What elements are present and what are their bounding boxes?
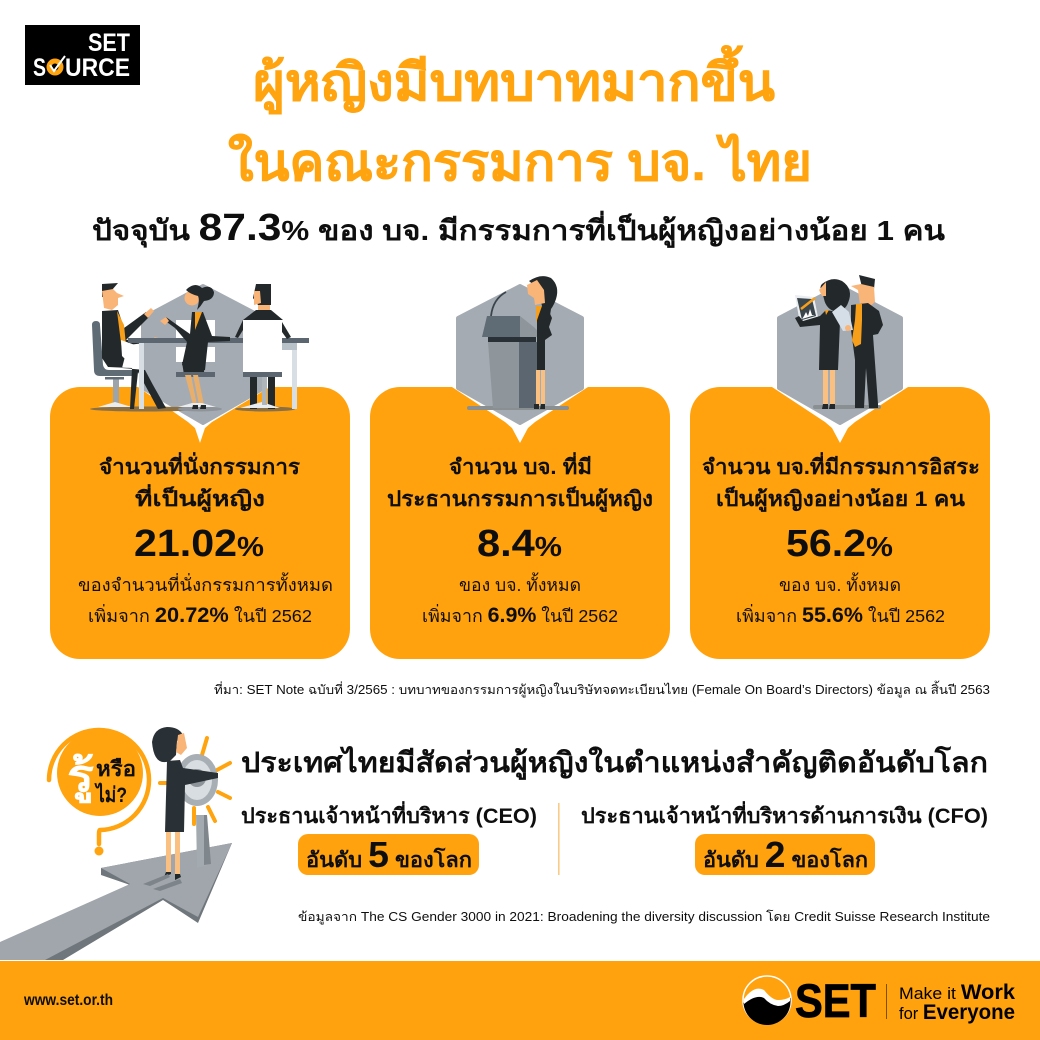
- icon: did you know bubble: รู้: [67, 752, 94, 803]
- card text: [78, 451, 333, 627]
- card text: จำนวน บจ. ที่มี: [449, 451, 592, 479]
- logo: SET SOURCE: [25, 25, 140, 85]
- panel: female chairpersons: [370, 276, 670, 659]
- CFO rank: อันดับ 2 ของโลก: [703, 834, 868, 875]
- card text: เพิ่มจาก 6.9% ในปี 2562: [422, 604, 618, 627]
- CEO rank: อันดับ 5 ของโลก: [306, 834, 472, 875]
- logo: SET SOURCE: SET: [88, 29, 130, 57]
- logo: SET: SET: [795, 974, 876, 1027]
- card text: ประธานกรรมการเป็นผู้หญิง: [387, 485, 653, 513]
- card text: จำนวนที่นั่งกรรมการ: [99, 451, 301, 479]
- logo: SET SOURCE: URCE: [65, 54, 130, 82]
- CFO rank: ประธานเจ้าหน้าที่บริหารด้านการเงิน (CFO): [581, 800, 988, 828]
- card text: [702, 451, 980, 627]
- card text: 21.02 %: [134, 523, 264, 565]
- card text: เพิ่มจาก 55.6% ในปี 2562: [736, 604, 945, 627]
- logo: SET: Make it Work: [899, 981, 1015, 1004]
- icon: did you know bubble: หรือ: [96, 757, 136, 781]
- logo: SET SOURCE: S: [33, 54, 46, 82]
- CEO rank: [241, 800, 537, 875]
- card text: [387, 451, 653, 627]
- illustration: woman at podium: [467, 276, 569, 410]
- heading: Thailand ranking: ประเทศไทยมีสัดส่วนผู้หญิงในตำแหน่งสำคัญติดอันดับโลก: [241, 745, 988, 780]
- source note 2: ข้อมูลจาก The CS Gender 3000 in 2021: Broadening the diversity discussion โดย Credit Suisse Research Institute: [298, 909, 990, 925]
- card text: ของ บจ. ทั้งหมด: [779, 572, 901, 595]
- title: ในคณะกรรมการ บจ. ไทย: [228, 133, 812, 191]
- card text: 56.2%: [786, 523, 893, 565]
- title: [228, 45, 812, 191]
- CFO rank: [581, 800, 988, 875]
- card text: ที่เป็นผู้หญิง: [135, 483, 265, 513]
- CEO rank: ประธานเจ้าหน้าที่บริหาร (CEO): [241, 800, 537, 828]
- card text: ของจำนวนที่นั่งกรรมการทั้งหมด: [78, 572, 333, 595]
- icon: did you know bubble: [49, 730, 149, 856]
- illustration: woman and man with tablets: [795, 275, 883, 409]
- icon: did you know bubble: ไม่?: [94, 782, 127, 807]
- card text: เป็นผู้หญิงอย่างน้อย 1 คน: [716, 485, 966, 513]
- logo: SET: [743, 974, 1015, 1027]
- card text: จำนวน บจ.ที่มีกรรมการอิสระ: [702, 451, 980, 479]
- panel: women board seats: [50, 283, 350, 659]
- logo: SET: for Everyone: [899, 1001, 1015, 1024]
- source note: ที่มา: SET Note ฉบับที่ 3/2565 : บทบาทของกรรมการผู้หญิงในบริษัทจดทะเบียนไทย (Female On Board’s Directors) ข้อมูล ณ สิ้นปี 2563: [214, 680, 990, 698]
- card text: 8.4%: [477, 523, 562, 565]
- card text: เพิ่มจาก 20.72% ในปี 2562: [88, 604, 312, 627]
- panel: independent directors: [690, 275, 990, 659]
- footer band: [0, 961, 1040, 1040]
- website: www.set.or.th: [23, 992, 113, 1009]
- card text: ของ บจ. ทั้งหมด: [459, 572, 581, 595]
- subtitle: ปัจจุบัน 87.3 % ของ บจ. มีกรรมการที่เป็นผู้หญิงอย่างน้อย 1 คน: [92, 207, 945, 249]
- illustration: arrow with woman at ship wheel: [0, 727, 232, 960]
- title: ผู้หญิงมีบทบาทมากขึ้น: [253, 45, 775, 115]
- illustration: board meeting: [90, 283, 309, 412]
